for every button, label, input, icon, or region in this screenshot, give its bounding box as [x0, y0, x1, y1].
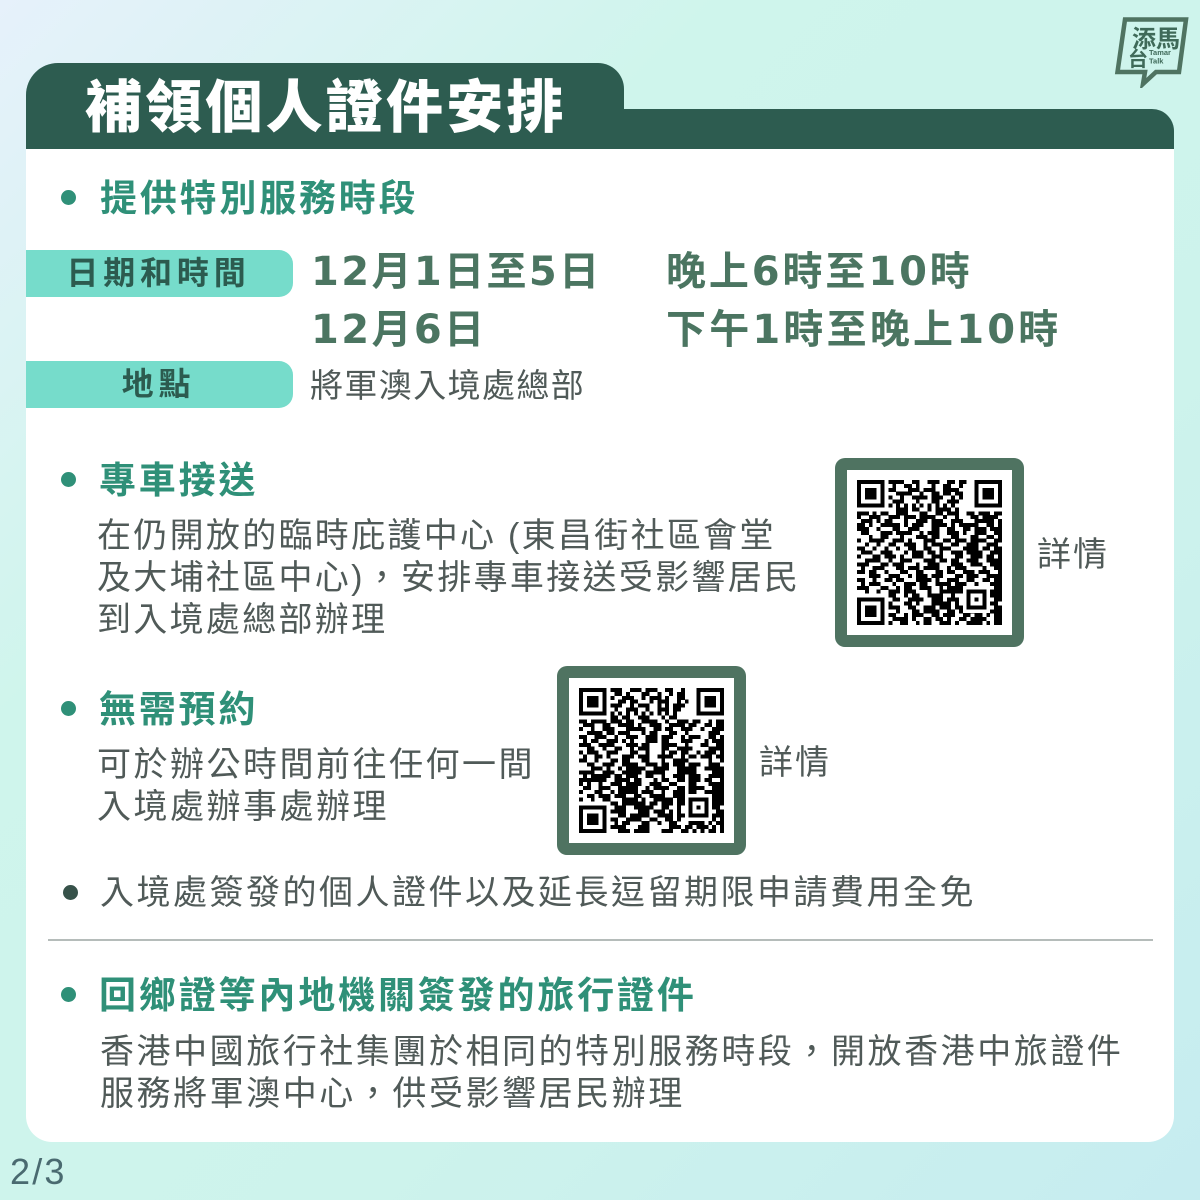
- title: 補領個人證件安排: [85, 76, 567, 140]
- bullet: fee waiver: [63, 885, 78, 900]
- heading: special service hours: 提供特別服務時段: [100, 178, 418, 219]
- divider: [48, 939, 1153, 941]
- label: date and time: [26, 250, 293, 297]
- heading: shuttle service: 專車接送: [99, 460, 258, 501]
- shuttle body text: 及大埔社區中心)，安排專車接送受影響居民: [97, 559, 800, 597]
- label: date and time: 日期和時間: [66, 255, 251, 291]
- logo: Tamar Talk: Tamar: [1149, 48, 1171, 57]
- venue text: 將軍澳入境處總部: [310, 367, 585, 404]
- bullet: shuttle: [61, 472, 76, 487]
- fee waiver text: 入境處簽發的個人證件以及延長逗留期限申請費用全免: [100, 874, 976, 912]
- travel documents body text: [100, 1033, 1123, 1113]
- heading: no appointment: 無需預約: [99, 689, 258, 730]
- shuttle body text: 在仍開放的臨時庇護中心 (東昌街社區會堂: [97, 517, 776, 555]
- times row two: 下午1時至晚上10時: [666, 307, 1062, 353]
- dates row two: 12月6日: [311, 307, 486, 353]
- travel documents body text: 服務將軍澳中心，供受影響居民辦理: [100, 1075, 685, 1113]
- QR code: no appointment details: [557, 666, 746, 855]
- dates row one: 12月1日至5日: [311, 249, 602, 295]
- QR caption: details: 詳情: [1037, 536, 1109, 574]
- label: venue: [26, 361, 293, 408]
- shuttle body text: 到入境處總部辦理: [97, 601, 387, 639]
- logo: Tamar Talk: 台: [1128, 47, 1148, 71]
- bullet: special service: [61, 190, 76, 205]
- QR caption: details: 詳情: [759, 744, 831, 782]
- label: venue: 地點: [122, 366, 195, 402]
- no appointment body text: 可於辦公時間前往任何一間: [97, 746, 535, 784]
- bullet: travel documents: [61, 987, 76, 1002]
- no appointment body text: 入境處辦事處辦理: [97, 788, 389, 826]
- logo: Tamar Talk: [1114, 17, 1188, 88]
- no appointment body text: [97, 746, 535, 826]
- times row one: 晚上6時至10時: [666, 249, 973, 295]
- logo: Tamar Talk: Talk: [1149, 56, 1164, 66]
- shuttle body text: [97, 517, 800, 639]
- travel documents body text: 香港中國旅行社集團於相同的特別服務時段，開放香港中旅證件: [100, 1033, 1123, 1071]
- heading: mainland travel documents: 回鄉證等內地機關簽發的旅行證件: [99, 975, 697, 1016]
- QR code: shuttle details: [835, 458, 1024, 647]
- header band: [26, 63, 1174, 149]
- page number: 2/3: [10, 1151, 67, 1192]
- bullet: no appointment: [61, 701, 76, 716]
- logo: Tamar Talk: 添馬: [1132, 26, 1180, 53]
